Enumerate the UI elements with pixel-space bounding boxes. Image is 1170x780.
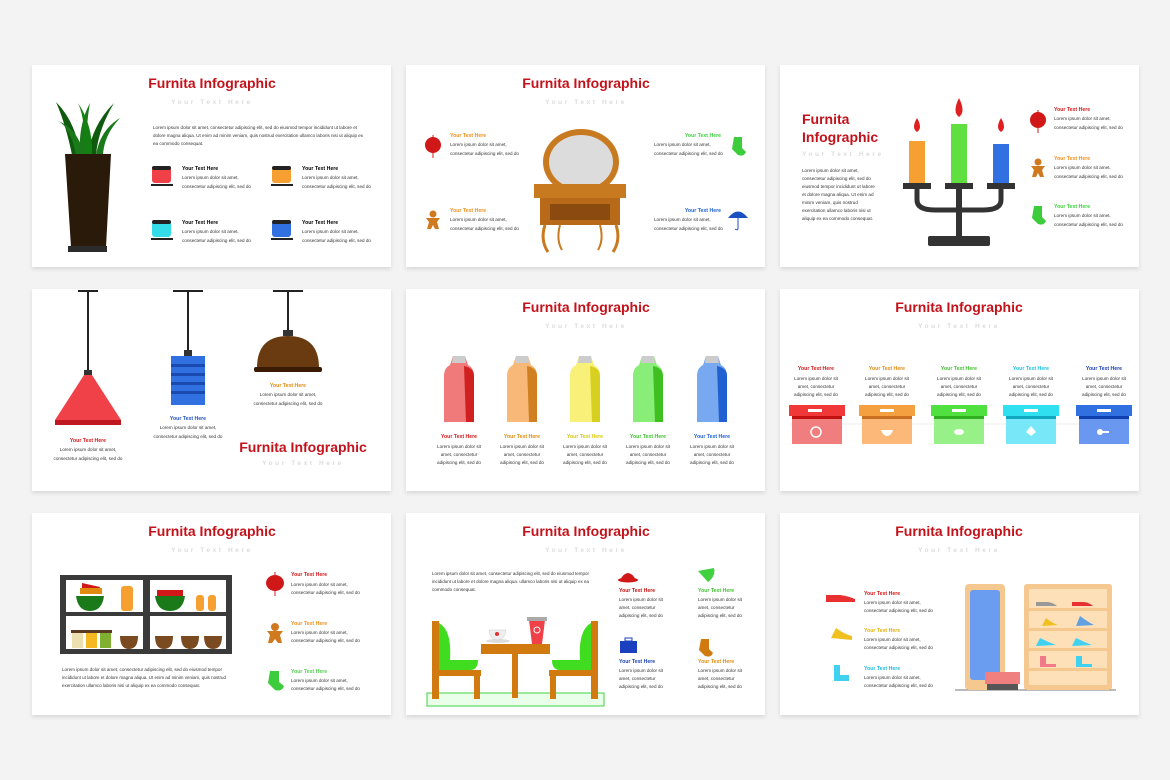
item: stocking: consectetur adipiscing elit, sed do [654,151,723,156]
icon: vanity table [534,129,626,252]
item: blue lamp text: Lorem ipsum dolor sit amet, [160,425,216,430]
item: red: Lorem ipsum dolor sit amet, [182,175,239,180]
item: umbrella: Lorem ipsum dolor sit amet, [654,217,711,222]
bottle blue: Lorem ipsum dolor sit [690,444,735,449]
bottle yellow: Your Text Here [567,434,603,440]
item: cyan: Lorem ipsum dolor sit amet, [182,229,239,234]
subtitle: Your Text Here [802,151,884,158]
item: lantern: Lorem ipsum dolor sit amet, [291,582,348,587]
item: red lamp text: Lorem ipsum dolor sit amet, [60,447,116,452]
item: gingerbread: consectetur adipiscing elit, sed do [450,226,519,231]
subtitle: Your Text Here [545,547,627,554]
item: brown lamp text: Your Text Here [270,383,306,389]
item: fan: Lorem ipsum dolor sit [698,597,743,602]
panel: slide 7 shelf [32,513,391,715]
item: hat: adipiscing elit, sed do [619,613,663,618]
item: fan: adipiscing elit, sed do [698,613,742,618]
bottle orange: adipiscing elit, sed do [500,460,544,465]
subtitle: Your Text Here [545,99,627,106]
item: red shoe: Lorem ipsum dolor sit amet, [864,600,921,605]
box cyan: Your Text Here [1013,366,1049,372]
item: lantern: Your Text Here [450,133,486,139]
box cyan: Lorem ipsum dolor sit [1009,376,1054,381]
box orange: Lorem ipsum dolor sit [865,376,910,381]
paragraph: ea commodo consequat. [153,141,203,146]
item: red lamp text: consectetur adipiscing elit, sed do [54,456,123,461]
bottle green: Your Text Here [630,434,666,440]
item: gingerbread [267,621,360,643]
box blue: Lorem ipsum dolor sit [1082,376,1127,381]
item: yellow heel: Lorem ipsum dolor sit amet, [864,637,921,642]
title: Furnita Infographic [522,523,650,539]
paragraph: aliquip ex ea commodo consequat. [802,216,873,221]
bottle green: adipiscing elit, sed do [626,460,670,465]
item: blue: Lorem ipsum dolor sit amet, [302,229,359,234]
bottle green [626,356,671,465]
paragraph: Lorem ipsum dolor sit amet, consectetur adipiscing elit, sed do eiusmod tempor [432,571,589,576]
item: lantern: consectetur adipiscing elit, sed do [1054,125,1123,130]
item: umbrella: Your Text Here [685,208,721,214]
item: gingerbread: Lorem ipsum dolor sit amet, [1054,165,1111,170]
item: stocking: Lorem ipsum dolor sit amet, [654,142,711,147]
box red: Lorem ipsum dolor sit [794,376,839,381]
item: red [151,166,251,189]
bottle red: Lorem ipsum dolor sit [437,444,482,449]
subtitle: Your Text Here [171,99,253,106]
bottle yellow: amet, consectetur [567,452,604,457]
box cyan: adipiscing elit, sed do [1009,392,1053,397]
paragraph: incididunt ut labore et dolore magna aliqua. ullamco laboris nisi ut aliquip ex ea [432,579,589,584]
bottle yellow: adipiscing elit, sed do [563,460,607,465]
paragraph [153,125,364,146]
bottle red [437,356,482,465]
item: lantern: Lorem ipsum dolor sit amet, [450,142,507,147]
paragraph: commodo consequat. [432,587,476,592]
item: hat: Lorem ipsum dolor sit [619,597,664,602]
item: lantern [1030,107,1123,133]
item: cyan boot: Your Text Here [864,666,900,672]
bottle blue: amet, consectetur [694,452,731,457]
item: brown lamp text [254,383,323,406]
bottle yellow: Lorem ipsum dolor sit [563,444,608,449]
box orange: amet, consectetur [869,384,906,389]
item: cyan: Your Text Here [182,220,218,226]
item: stocking [654,133,746,156]
box green: Lorem ipsum dolor sit [937,376,982,381]
item: gingerbread: Your Text Here [291,621,327,627]
panel: slide 9 shoes [780,513,1139,715]
paragraph: et dolore magna aliqua. Ut enim ad [802,192,874,197]
paragraph: dolore magna aliqua. Ut enim ad minim veniam, quis nostrud exercitation ullamco laboris nisi ut aliquip ex [153,133,364,138]
item: lantern: Your Text Here [1054,107,1090,113]
bottle red: adipiscing elit, sed do [437,460,481,465]
subtitle: Your Text Here [918,547,1000,554]
item: red shoe: consectetur adipiscing elit, sed do [864,608,933,613]
box cyan [1003,366,1059,444]
subtitle: Your Text Here [918,323,1000,330]
title: Furnita [802,111,850,127]
bottle yellow [563,356,608,465]
item: blue [271,220,371,243]
item: cyan [151,220,251,243]
item: lantern: Lorem ipsum dolor sit amet, [1054,116,1111,121]
item: suitcase [619,638,664,689]
item: gingerbread [1031,156,1123,179]
panel: slide 6 boxes [780,289,1139,491]
item: yellow heel: consectetur adipiscing elit, sed do [864,645,933,650]
item: stocking: consectetur adipiscing elit, sed do [291,686,360,691]
item: blue: consectetur adipiscing elit, sed do [302,238,371,243]
paragraph: Lorem ipsum dolor sit amet, consectetur adipiscing elit, sed do eiusmod tempor [62,667,222,672]
bottle green: Lorem ipsum dolor sit [626,444,671,449]
bottle orange: Your Text Here [504,434,540,440]
item: suitcase: Lorem ipsum dolor sit [619,668,664,673]
item: stocking: amet, consectetur [698,676,735,681]
item: stocking [698,639,743,689]
item: stocking [268,669,360,691]
box blue [1076,366,1132,444]
item: gingerbread: consectetur adipiscing elit, sed do [1054,174,1123,179]
item: orange: Lorem ipsum dolor sit amet, [302,175,359,180]
item: stocking: Lorem ipsum dolor sit amet, [1054,213,1111,218]
item: stocking: Your Text Here [291,669,327,675]
box green: amet, consectetur [941,384,978,389]
item: red shoe [826,591,933,613]
item: hat [618,573,664,618]
box green: adipiscing elit, sed do [937,392,981,397]
box orange [859,366,915,444]
item: stocking: Lorem ipsum dolor sit [698,668,743,673]
paragraph [62,667,226,688]
item: gingerbread: consectetur adipiscing elit, sed do [291,638,360,643]
item: cyan boot: Lorem ipsum dolor sit amet, [864,675,921,680]
panel: slide 4 lamps [32,289,391,491]
item: orange: Your Text Here [302,166,338,172]
item: blue lamp text [154,416,223,439]
item: stocking: Your Text Here [1054,204,1090,210]
box blue: adipiscing elit, sed do [1082,392,1126,397]
paragraph: exercitation ullamco laboris nisi ut [802,208,871,213]
box blue: Your Text Here [1086,366,1122,372]
title: Furnita Infographic [895,523,1023,539]
box red: amet, consectetur [798,384,835,389]
icon: shelf [60,575,232,654]
item: cyan boot [834,665,933,688]
item: blue lamp text: Your Text Here [170,416,206,422]
paragraph: exercitation ullamco laboris nisi ut aliquip ex ea commodo consequat. [62,683,200,688]
item: gingerbread: Your Text Here [1054,156,1090,162]
item: stocking: Your Text Here [698,659,734,665]
icon: dining set [427,617,604,706]
icon: red lamp [55,290,121,425]
item: brown lamp text: consectetur adipiscing elit, sed do [254,401,323,406]
item: cyan: consectetur adipiscing elit, sed do [182,238,251,243]
item: lantern [266,572,360,596]
panel: slide 2 vanity [406,65,765,267]
item: fan: Your Text Here [698,588,734,594]
paragraph: incididunt ut labore et dolore magna aliqua. Ut enim ad minim veniam, quis nostrud [62,675,226,680]
icon: mirror and shoe cabinet [955,584,1116,690]
item: stocking: adipiscing elit, sed do [698,684,742,689]
item: stocking: Lorem ipsum dolor sit amet, [291,678,348,683]
item: red shoe: Your Text Here [864,591,900,597]
paragraph [432,571,589,592]
subtitle: Your Text Here [171,547,253,554]
item: stocking [1032,204,1123,227]
item: brown lamp text: Lorem ipsum dolor sit amet, [260,392,316,397]
panel: slide 3 candelabra [780,65,1139,267]
paragraph: minim veniam, quis nostrud [802,200,858,205]
title: Furnita Infographic [895,299,1023,315]
panel: slide 8 dining [406,513,765,715]
box green: Your Text Here [941,366,977,372]
item: fan [698,568,743,618]
item: lantern: consectetur adipiscing elit, sed do [291,590,360,595]
bottle orange: Lorem ipsum dolor sit [500,444,545,449]
paragraph [802,168,875,221]
box orange: Your Text Here [869,366,905,372]
item: gingerbread [426,208,519,231]
item: lantern: consectetur adipiscing elit, sed do [450,151,519,156]
bottle green: amet, consectetur [630,452,667,457]
panel: slide 3 candelabra: Infographic [802,129,878,145]
item: stocking: Your Text Here [685,133,721,139]
title: Furnita Infographic [522,299,650,315]
box blue: amet, consectetur [1086,384,1123,389]
box orange: adipiscing elit, sed do [865,392,909,397]
title: Furnita Infographic [239,439,367,455]
item: yellow heel [831,628,933,650]
subtitle: Your Text Here [545,323,627,330]
item: suitcase: amet, consectetur [619,676,656,681]
paragraph: Lorem ipsum dolor sit amet, consectetur adipiscing elit, sed do eiusmod tempor incididunt ut labore et [153,125,358,130]
bottle blue [690,356,735,465]
item: orange: consectetur adipiscing elit, sed do [302,184,371,189]
paragraph: Lorem ipsum dolor sit amet, [802,168,859,173]
item: suitcase: adipiscing elit, sed do [619,684,663,689]
box green [931,366,987,444]
title: Furnita Infographic [148,523,276,539]
item: hat: Your Text Here [619,588,655,594]
box cyan: amet, consectetur [1013,384,1050,389]
icon: candelabra [903,98,1015,246]
item: lantern: Your Text Here [291,572,327,578]
paragraph: eiusmod tempor incididunt ut labore [802,184,875,189]
title: Furnita Infographic [522,75,650,91]
panel: slide 5 bottles [406,289,765,491]
icon: blue lamp [171,290,205,405]
item: blue lamp text: consectetur adipiscing elit, sed do [154,434,223,439]
item: hat: amet, consectetur [619,605,656,610]
icon: plant [56,102,120,252]
bottle blue: adipiscing elit, sed do [690,460,734,465]
item: cyan boot: consectetur adipiscing elit, sed do [864,683,933,688]
paragraph: consectetur adipiscing elit, sed do [802,176,871,181]
item: red lamp text: Your Text Here [70,438,106,444]
icon: brown lamp [254,290,322,372]
item: blue: Your Text Here [302,220,338,226]
item: lantern [425,133,519,158]
box red: Your Text Here [798,366,834,372]
item: orange [271,166,371,189]
item: umbrella: consectetur adipiscing elit, sed do [654,226,723,231]
subtitle: Your Text Here [262,460,344,467]
bottle red: amet, consectetur [441,452,478,457]
title: Furnita Infographic [148,75,276,91]
item: gingerbread: Lorem ipsum dolor sit amet, [291,630,348,635]
panel: slide 1 plant [32,65,391,267]
item: red: Your Text Here [182,166,218,172]
bottle red: Your Text Here [441,434,477,440]
box red: adipiscing elit, sed do [794,392,838,397]
box red [789,366,845,444]
item: red lamp text [54,438,123,461]
bottle orange: amet, consectetur [504,452,541,457]
item: gingerbread: Your Text Here [450,208,486,214]
bottle blue: Your Text Here [694,434,730,440]
item: umbrella [654,208,748,231]
item: stocking: consectetur adipiscing elit, sed do [1054,222,1123,227]
item: red: consectetur adipiscing elit, sed do [182,184,251,189]
item: suitcase: Your Text Here [619,659,655,665]
item: gingerbread: Lorem ipsum dolor sit amet, [450,217,507,222]
item: yellow heel: Your Text Here [864,628,900,634]
bottle orange [500,356,545,465]
item: fan: amet, consectetur [698,605,735,610]
